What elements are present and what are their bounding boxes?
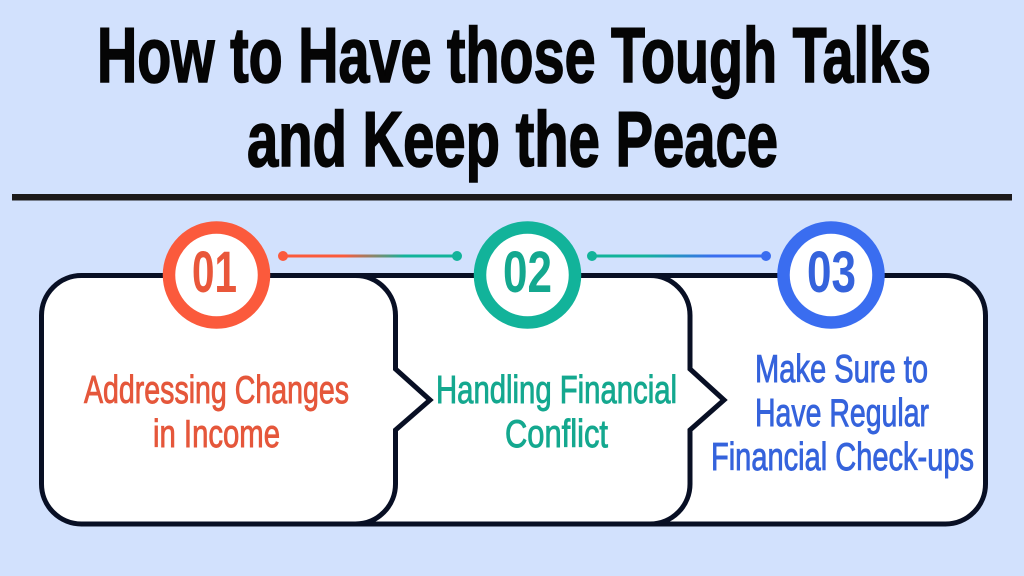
badge: 03 bbox=[784, 228, 878, 322]
badge: 03: 03 bbox=[807, 240, 856, 305]
title: and Keep the Peace bbox=[247, 95, 778, 183]
title divider bbox=[12, 194, 1012, 200]
text: step 1 label: Addressing Changes bbox=[84, 369, 349, 412]
text: step 3 label bbox=[711, 348, 974, 479]
badge: 02 bbox=[480, 228, 575, 322]
badge: 02: 02 bbox=[503, 240, 552, 305]
badge: 01: 01 bbox=[192, 240, 237, 305]
text: step 2 label bbox=[436, 369, 677, 456]
text: step 2 label: Handling Financial bbox=[436, 369, 677, 412]
text: step 3 label: Make Sure to bbox=[755, 348, 928, 391]
text: step 1 label bbox=[84, 369, 349, 456]
title bbox=[97, 11, 931, 183]
badge: 01 bbox=[169, 228, 264, 322]
text: step 2 label: Conflict bbox=[505, 413, 608, 456]
connector: 02 to 03 bbox=[587, 251, 771, 261]
panel: step 3 card bbox=[600, 276, 986, 524]
connector: 01 to 02 bbox=[278, 251, 462, 261]
text: step 3 label: Have Regular bbox=[755, 392, 929, 435]
panel: step 1 card bbox=[42, 276, 430, 524]
panel: step 2 card bbox=[340, 276, 724, 524]
text: step 1 label: in Income bbox=[153, 413, 280, 456]
